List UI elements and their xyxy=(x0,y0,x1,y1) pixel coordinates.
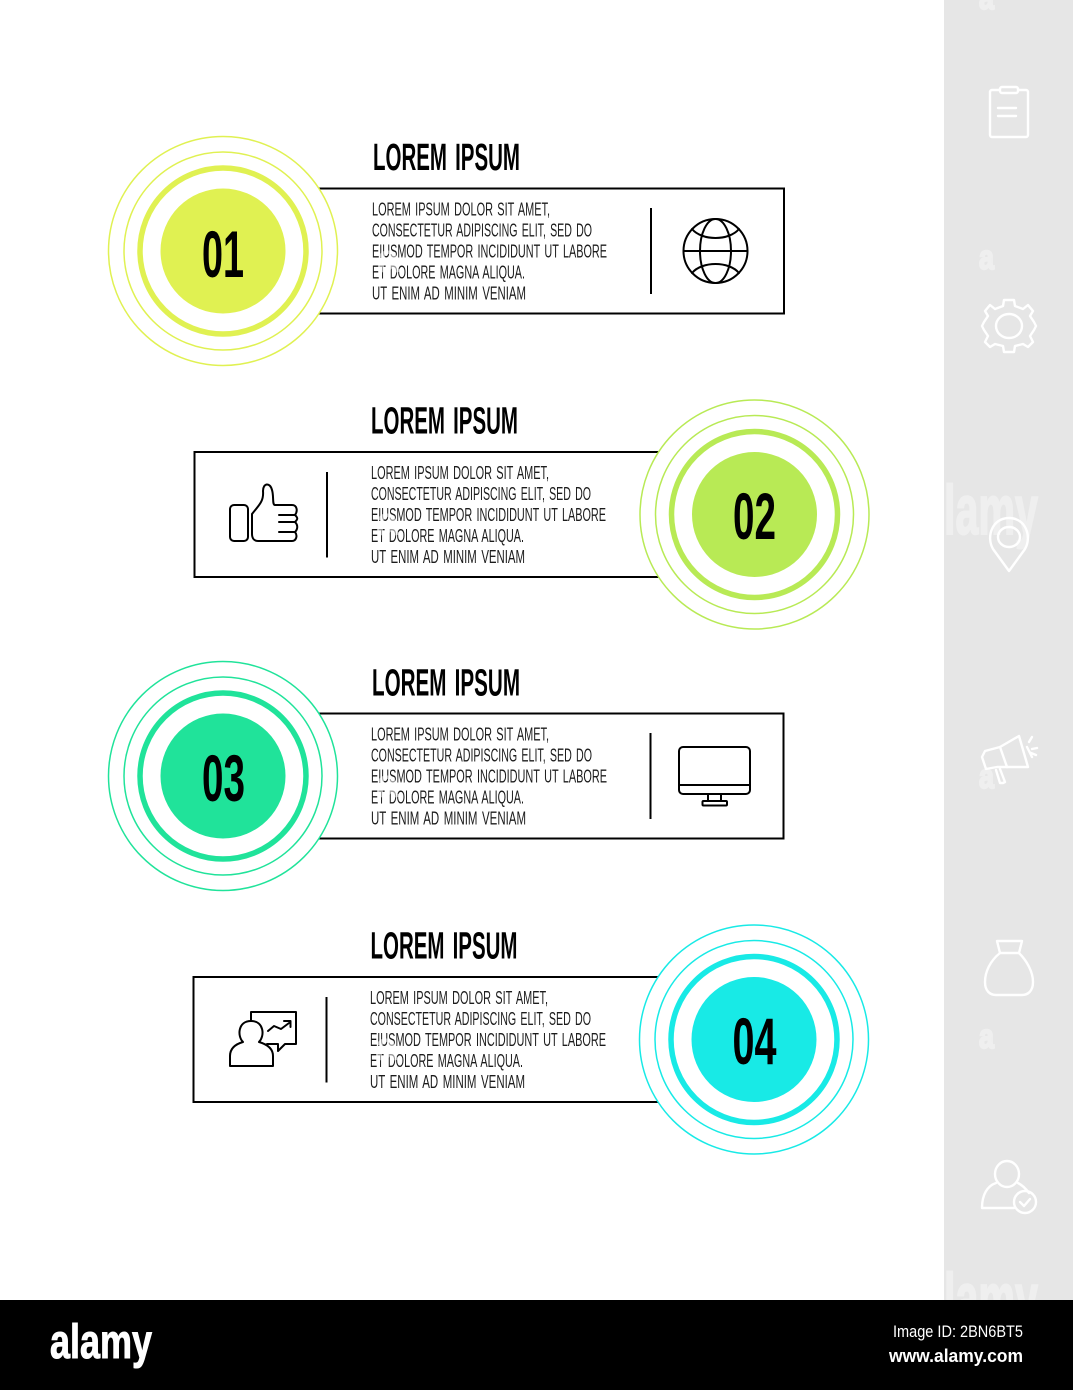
text block 01: a xyxy=(377,237,400,281)
sidebar watermark: a xyxy=(979,758,995,796)
heading 03: LOREM IPSUM xyxy=(372,662,520,704)
icon: presenter with chart xyxy=(230,1012,296,1066)
text block 01: EIUSMOD TEMPOR INCIDIDUNT UT LABORE xyxy=(372,242,607,262)
panel: step 03 xyxy=(108,662,784,890)
text block 01: ET DOLORE MAGNA ALIQUA. xyxy=(372,262,525,282)
text block 01: LOREM IPSUM DOLOR SIT AMET, xyxy=(372,200,550,220)
text block 02 xyxy=(371,463,606,567)
text block 04 xyxy=(370,988,606,1092)
sidebar watermark: a xyxy=(979,1018,995,1056)
text block 02: a xyxy=(376,500,399,544)
text block 02: LOREM IPSUM DOLOR SIT AMET, xyxy=(371,463,549,483)
text block 03: CONSECTETUR ADIPISCING ELIT, SED DO xyxy=(371,746,592,766)
number 04: 04 xyxy=(732,1004,777,1078)
rings 02 xyxy=(640,400,869,629)
image id: Image ID: 2BN6BT5 xyxy=(893,1322,1023,1341)
panel: step 04 xyxy=(194,925,868,1154)
number 01: 01 xyxy=(202,217,244,291)
text block 02: CONSECTETUR ADIPISCING ELIT, SED DO xyxy=(371,484,591,504)
icon: thumbs up xyxy=(230,484,297,541)
box 03 xyxy=(250,714,784,838)
icon: globe xyxy=(684,219,748,283)
text block 02: EIUSMOD TEMPOR INCIDIDUNT UT LABORE xyxy=(371,505,606,525)
panel: right sidebar xyxy=(944,0,1073,1337)
box 04 xyxy=(194,977,728,1102)
text block 01: UT ENIM AD MINIM VENIAM xyxy=(372,284,526,304)
text block 03: ET DOLORE MAGNA ALIQUA. xyxy=(371,788,524,808)
text block 03 xyxy=(371,724,607,828)
icon: user check xyxy=(982,1161,1036,1213)
divider 04 xyxy=(326,997,328,1082)
divider 01 xyxy=(650,208,652,294)
text block 03: UT ENIM AD MINIM VENIAM xyxy=(371,808,526,828)
text block 02: ET DOLORE MAGNA ALIQUA. xyxy=(371,526,524,546)
icon: megaphone xyxy=(982,736,1037,783)
icon: map pin xyxy=(990,518,1028,571)
rings 01 xyxy=(108,136,338,366)
icon: clipboard xyxy=(990,87,1028,137)
icon: monitor xyxy=(679,747,750,806)
heading 02: LOREM IPSUM xyxy=(371,400,518,442)
text block 02: UT ENIM AD MINIM VENIAM xyxy=(371,547,525,567)
text block 04: a xyxy=(375,1025,398,1069)
website: www.alamy.com xyxy=(888,1346,1023,1366)
sidebar watermark xyxy=(944,0,1038,1337)
text block 04: UT ENIM AD MINIM VENIAM xyxy=(370,1072,525,1092)
text block 04: CONSECTETUR ADIPISCING ELIT, SED DO xyxy=(370,1009,591,1029)
number 02: 02 xyxy=(733,479,776,553)
box 02 xyxy=(194,452,728,577)
text block 01: CONSECTETUR ADIPISCING ELIT, SED DO xyxy=(372,220,592,240)
divider 03 xyxy=(650,733,652,819)
text block 03: LOREM IPSUM DOLOR SIT AMET, xyxy=(371,724,549,744)
footer logo: alamy xyxy=(50,1316,152,1369)
text block 01 xyxy=(372,200,607,304)
heading 04: LOREM IPSUM xyxy=(370,926,518,968)
icon: money bag xyxy=(985,941,1033,995)
text block 03: EIUSMOD TEMPOR INCIDIDUNT UT LABORE xyxy=(371,766,607,786)
number 03: 03 xyxy=(202,741,245,815)
sidebar watermark: a xyxy=(979,239,995,277)
icon: gear xyxy=(982,300,1036,352)
box 01 xyxy=(250,188,784,314)
text block 04: LOREM IPSUM DOLOR SIT AMET, xyxy=(370,988,548,1008)
text block 04: EIUSMOD TEMPOR INCIDIDUNT UT LABORE xyxy=(370,1030,606,1050)
heading 01: LOREM IPSUM xyxy=(373,137,520,179)
panel: step 02 xyxy=(194,400,869,629)
divider 02 xyxy=(326,472,328,558)
text block 03: a xyxy=(376,762,399,806)
panel: step 01 xyxy=(108,136,784,366)
rings 03 xyxy=(108,662,338,890)
footer bar xyxy=(0,1300,1073,1390)
rings 04 xyxy=(640,925,868,1154)
text block 04: ET DOLORE MAGNA ALIQUA. xyxy=(370,1051,523,1071)
